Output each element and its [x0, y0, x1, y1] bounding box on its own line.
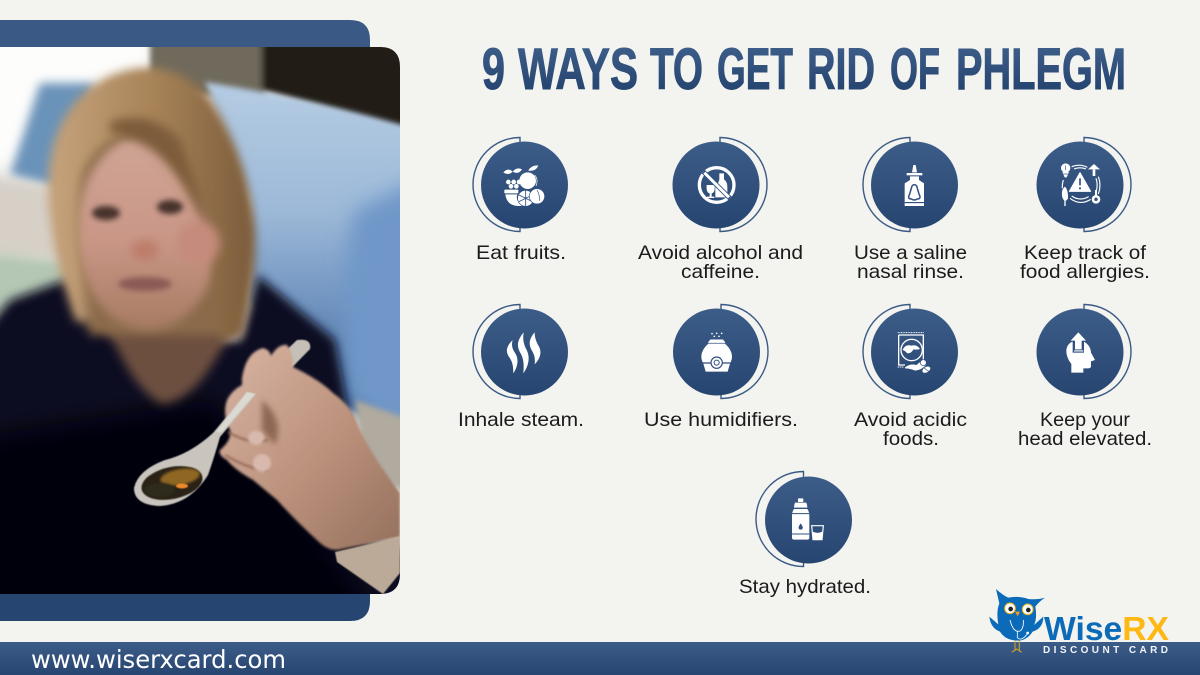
- tip: avoid acidic foods: [854, 304, 967, 450]
- title: PHLEGM: [956, 37, 1126, 102]
- label: keep track of food allergies: Keep track of: [1024, 242, 1147, 264]
- tip: keep head elevated: [1018, 304, 1152, 450]
- icon: owl mascot: [989, 589, 1045, 652]
- logo tagline: DISCOUNT CARD: [1043, 645, 1168, 656]
- label: keep track of food allergies: [1020, 242, 1150, 283]
- tip: saline nasal rinse: [854, 138, 967, 283]
- tip: food allergies: [1020, 138, 1150, 283]
- title: GET: [717, 37, 793, 102]
- label: avoid alcohol and caffeine: [638, 242, 803, 283]
- label: use humidifiers: Use humidifiers.: [644, 409, 798, 431]
- website url: www.wiserxcard.com: [31, 645, 286, 674]
- title: 9: [482, 37, 505, 102]
- top navy band behind photo: [0, 20, 370, 47]
- label: stay hydrated: Stay hydrated.: [739, 576, 871, 598]
- label: keep track of food allergies: food allergies.: [1020, 261, 1150, 283]
- footer bar: [0, 642, 1200, 675]
- icon: humidifier: [701, 332, 732, 372]
- title: RID: [807, 37, 875, 102]
- icon: no alcohol: [699, 168, 734, 202]
- tip: eat fruits: [473, 138, 568, 264]
- icon: head with up arrow: [1066, 332, 1095, 373]
- icon: allergy warning cycle: [1061, 163, 1100, 206]
- logo: WiseRX discount card: [989, 589, 1169, 656]
- icon: nasal spray: [905, 165, 924, 206]
- title: TO: [650, 37, 703, 102]
- label: saline nasal rinse: nasal rinse.: [857, 261, 964, 283]
- label: eat fruits: Eat fruits.: [476, 242, 566, 264]
- label: avoid alcohol and caffeine: Avoid alcohol and: [638, 242, 803, 264]
- icon: fruit bowl: [503, 165, 545, 206]
- label: keep your head elevated: head elevated.: [1018, 428, 1152, 450]
- photo: child being offered spoon of syrup: [0, 47, 400, 594]
- title: OF: [890, 37, 940, 102]
- label: avoid alcohol and caffeine: caffeine.: [681, 261, 760, 283]
- label: avoid acidic foods: [854, 409, 967, 450]
- label: inhale steam: Inhale steam.: [458, 409, 584, 431]
- tip: use humidifiers: [644, 304, 798, 431]
- label: keep your head elevated: [1018, 409, 1152, 450]
- tip: inhale steam: [458, 304, 584, 431]
- icon: water bottle and glass: [792, 498, 823, 540]
- tip: avoid alcohol and caffeine: [638, 138, 803, 283]
- icon: steam: [507, 332, 540, 373]
- logo wordmark: WiseRX: [1044, 610, 1169, 647]
- title: WAYS: [518, 37, 638, 102]
- label: saline nasal rinse: Use a saline: [854, 242, 967, 264]
- tip: stay hydrated: [739, 472, 871, 598]
- label: saline nasal rinse: [854, 242, 967, 283]
- title: [482, 37, 1126, 102]
- icon: chips bag and pills: [898, 333, 931, 374]
- label: avoid acidic foods: Avoid acidic: [854, 409, 967, 431]
- label: avoid acidic foods: foods.: [883, 428, 939, 450]
- bottom navy band behind photo: [0, 594, 370, 621]
- label: keep your head elevated: Keep your: [1040, 409, 1130, 431]
